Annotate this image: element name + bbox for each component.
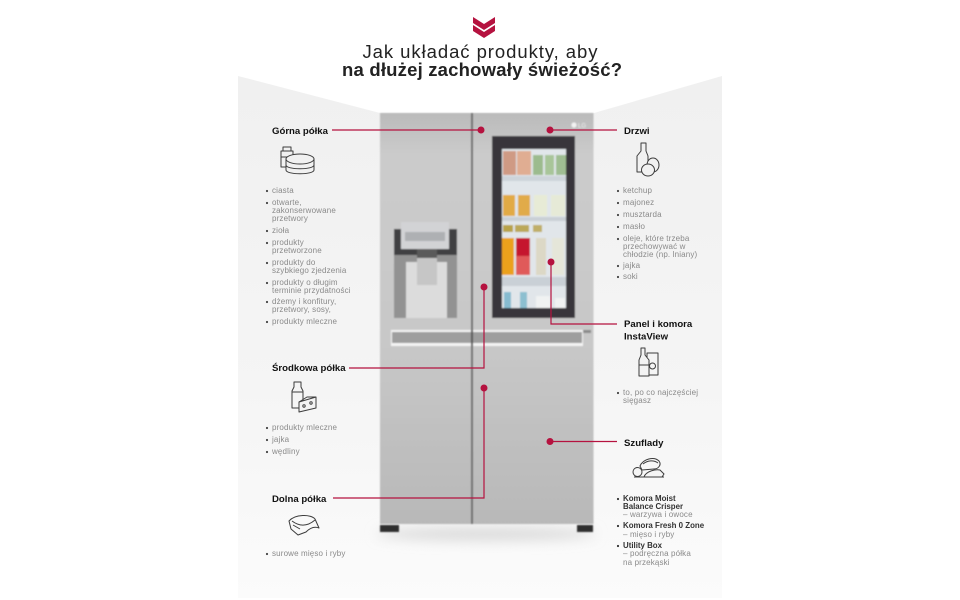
list: masło bbox=[623, 222, 645, 231]
right door bbox=[473, 113, 594, 524]
list: zioła bbox=[272, 226, 290, 235]
list: produkty o długim bbox=[272, 278, 338, 287]
handle band bbox=[391, 330, 591, 346]
list: jajka bbox=[271, 435, 290, 444]
list: zakonserwowane bbox=[272, 206, 336, 215]
water dispenser bbox=[394, 222, 457, 318]
list: Utility Box bbox=[623, 541, 663, 550]
callout: Dolna półka line bbox=[333, 384, 488, 498]
list bbox=[266, 423, 337, 456]
heading: Dolna półka bbox=[272, 494, 327, 505]
icon: bottle and jar bbox=[639, 348, 658, 376]
panel: Panel i komora InstaView bbox=[617, 319, 698, 405]
list bbox=[617, 388, 698, 405]
list: przetwory, sosy, bbox=[272, 305, 331, 314]
icon: milk and cheese bbox=[292, 382, 316, 412]
list: przetworzone bbox=[272, 246, 322, 255]
callout: Środkowa półka line bbox=[349, 284, 488, 368]
heading: InstaView bbox=[624, 332, 669, 342]
heading: Panel i komora bbox=[624, 319, 693, 330]
left door bbox=[380, 113, 471, 524]
list: otwarte, bbox=[272, 198, 302, 207]
LG logo: LG bbox=[578, 124, 586, 130]
list: przetwory bbox=[272, 214, 308, 223]
panel: Dolna półka bbox=[266, 494, 346, 558]
list: ketchup bbox=[623, 186, 652, 195]
list: – warzywa i owoce bbox=[623, 510, 693, 519]
list: na przekąski bbox=[623, 558, 670, 567]
list: wędliny bbox=[271, 447, 300, 456]
list: sięgasz bbox=[623, 396, 651, 405]
list bbox=[617, 494, 705, 567]
door gap bbox=[471, 113, 473, 524]
icon: vegetables and fish bbox=[633, 459, 664, 477]
list: szybkiego zjedzenia bbox=[272, 266, 347, 275]
heading: Górna półka bbox=[272, 126, 329, 137]
heading: Drzwi bbox=[624, 126, 650, 137]
callout: Górna półka line bbox=[332, 126, 484, 134]
heading: Środkowa półka bbox=[272, 362, 346, 374]
list: jajka bbox=[622, 261, 641, 270]
list: – mięso i ryby bbox=[623, 530, 674, 539]
list: terminie przydatności bbox=[272, 286, 351, 295]
fridge feet bbox=[380, 525, 593, 532]
list bbox=[266, 186, 351, 326]
list: produkty mleczne bbox=[272, 317, 337, 326]
icon: bottle and eggs bbox=[637, 143, 659, 176]
title: na dłużej zachowały świeżość? bbox=[342, 59, 622, 80]
list: musztarda bbox=[623, 210, 662, 219]
list: ciasta bbox=[272, 186, 294, 195]
list: produkty bbox=[272, 238, 304, 247]
list: produkty do bbox=[272, 258, 316, 267]
icon: meat bbox=[289, 515, 319, 535]
list: chłodzie (np. lniany) bbox=[623, 250, 697, 259]
background panel bbox=[238, 76, 722, 598]
list: – podręczna półka bbox=[623, 549, 691, 558]
panel: Drzwi bbox=[617, 126, 697, 281]
callout: Panel InstaView line bbox=[548, 258, 617, 324]
list: dżemy i konfitury, bbox=[272, 297, 336, 306]
callout: Drzwi line bbox=[546, 126, 617, 134]
list: oleje, które trzeba bbox=[623, 234, 690, 243]
list: surowe mięso i ryby bbox=[272, 549, 346, 558]
list: produkty mleczne bbox=[272, 423, 337, 432]
floor shadow bbox=[376, 527, 596, 541]
LG logo bbox=[571, 122, 586, 130]
icon: chevrons bbox=[473, 17, 495, 38]
list: to, po co najczęściej bbox=[623, 388, 698, 397]
list: soki bbox=[623, 272, 638, 281]
list bbox=[617, 186, 697, 281]
refrigerator bbox=[380, 113, 594, 532]
callout: Szuflady line bbox=[546, 438, 617, 445]
panel: Szuflady bbox=[617, 438, 705, 567]
list: przechowywać w bbox=[623, 242, 686, 251]
heading: Szuflady bbox=[624, 438, 664, 449]
list: Balance Crisper bbox=[623, 502, 683, 511]
icon: cake and jars bbox=[281, 147, 314, 174]
panel: Górna półka bbox=[266, 126, 351, 326]
InstaView window bbox=[492, 136, 575, 318]
title bbox=[342, 41, 622, 80]
list: Komora Moist bbox=[623, 494, 676, 503]
panel: Środkowa półka bbox=[266, 362, 346, 456]
title: Jak układać produkty, aby bbox=[362, 41, 598, 62]
list: Komora Fresh 0 Zone bbox=[623, 521, 705, 530]
list: majonez bbox=[623, 198, 654, 207]
